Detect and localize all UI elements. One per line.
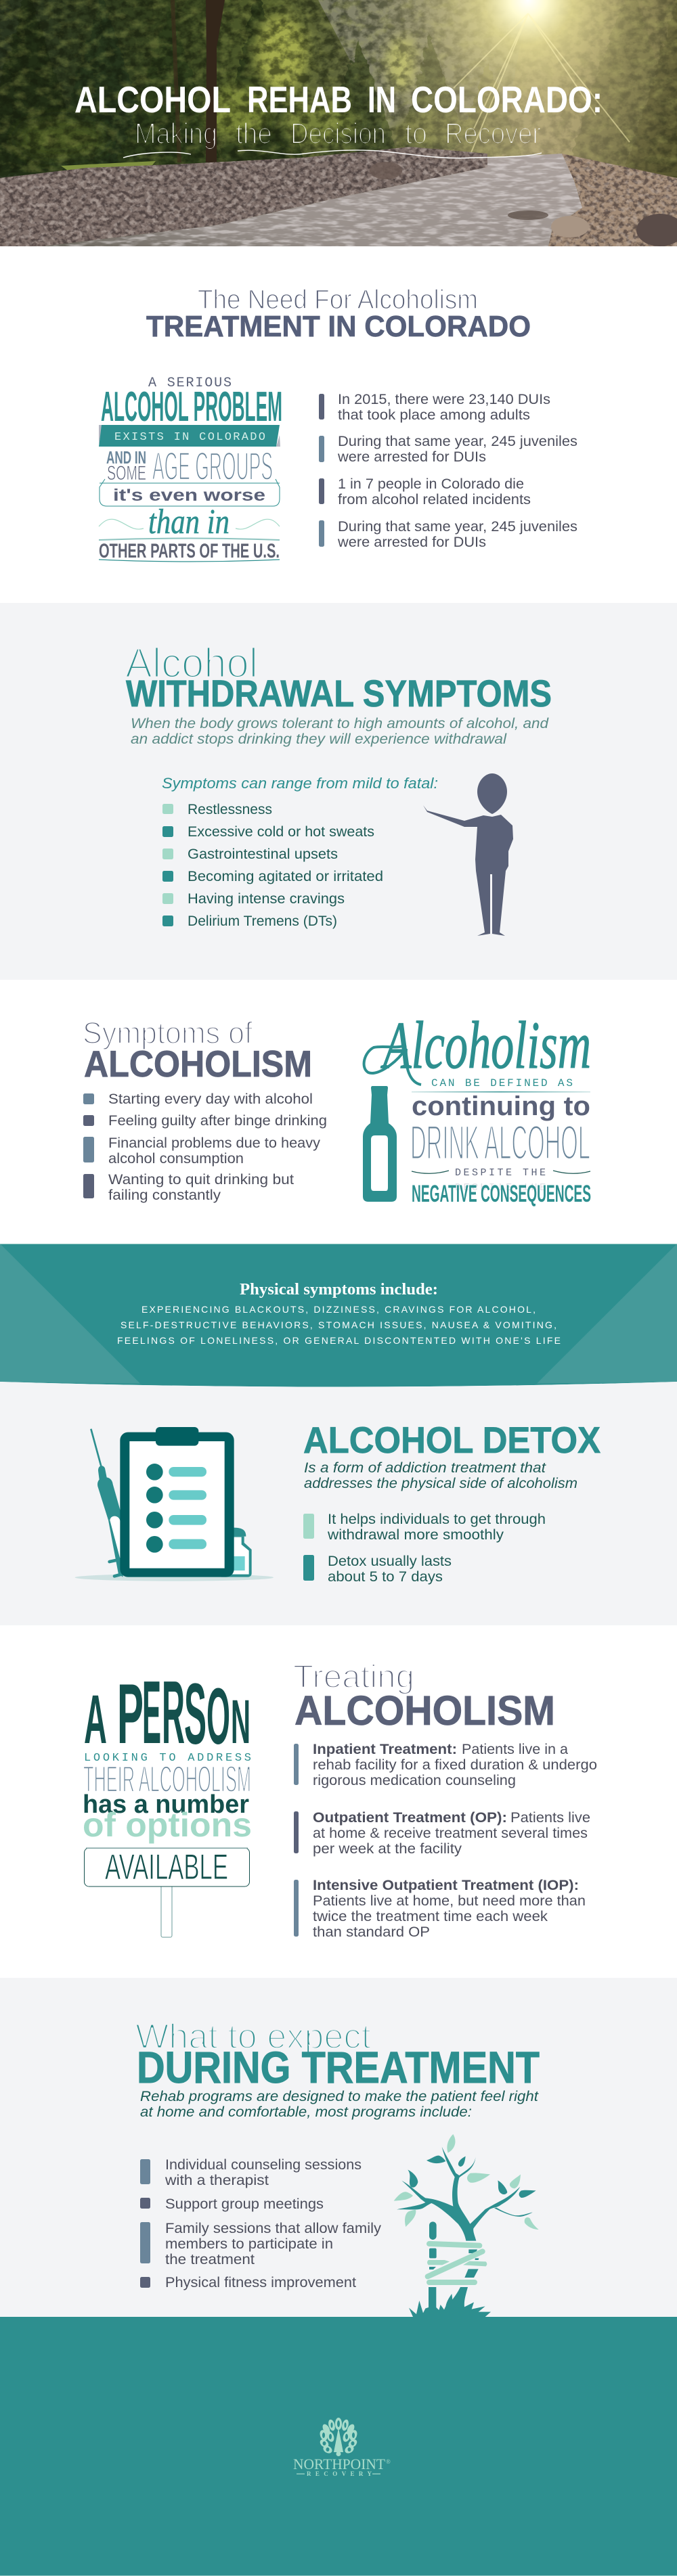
treatment: inpatient <box>294 1742 597 1788</box>
symptoms list: Delirium Tremens (DTs) <box>188 913 337 929</box>
detox description: Is a form of addiction treatment that <box>304 1460 546 1476</box>
treatment: outpatient: at home & receive treatment several times <box>313 1826 588 1841</box>
treatment: intensive outpatient: Patients live at home, but need more than <box>313 1893 586 1909</box>
subtitle <box>135 117 541 150</box>
symptoms list: Gastrointestinal upsets <box>188 846 338 862</box>
typographic sign: a person looking to address: AVAILABLE <box>105 1847 228 1887</box>
list: program elements: the treatment <box>165 2252 255 2267</box>
fact: juveniles arrested <box>319 434 577 465</box>
list: program elements <box>140 2157 382 2290</box>
physical symptoms text: FEELINGS OF LONELINESS, OR GENERAL DISCONTENTED WITH ONE'S LIFE <box>117 1335 561 1346</box>
subtitle: to <box>405 117 427 150</box>
logo: Northpoint peacock: ® <box>386 2458 391 2465</box>
subtitle: the <box>236 117 272 150</box>
subtitle: Recover <box>445 117 541 150</box>
illustration: clipboard, syringe and vial <box>75 1427 274 1581</box>
heading: Symptoms of <box>83 1016 253 1050</box>
treatment: inpatient: Patients live in a <box>462 1742 568 1757</box>
detox point two: about 5 to 7 days <box>328 1569 443 1585</box>
fact: juveniles arrested repeat: were arrested for DUIs <box>337 535 486 550</box>
treatment: intensive outpatient <box>294 1878 586 1940</box>
symptom list <box>83 1091 327 1203</box>
panel: treating alcoholism: N <box>231 1688 250 1757</box>
typographic sign: a person looking to address: E <box>142 1663 161 1762</box>
intro text: an addict stops drinking they will experience withdrawal <box>131 731 507 747</box>
list: program elements: Support group meetings <box>165 2196 324 2212</box>
list: program elements: Family sessions that allow family <box>165 2221 382 2236</box>
typographic quote: alcoholism definition <box>364 1008 591 1207</box>
list: program elements: Individual counseling sessions <box>165 2157 362 2173</box>
typographic sign: a person looking to address: R <box>162 1663 185 1762</box>
panel: need for treatment: AGE GROUPS <box>152 445 273 489</box>
heading <box>125 640 552 715</box>
intro text: When the body grows tolerant to high amounts of alcohol, and <box>131 716 549 731</box>
panel: what to expect during treatment <box>0 1978 677 2317</box>
typographic sign: a person looking to address: A <box>84 1681 107 1758</box>
typographic quote: alcoholism definition: DESPITE THE <box>455 1180 546 1192</box>
typographic sign: a person looking to address: O <box>206 1672 230 1761</box>
typographic quote: alcoholism definition: CAN BE DEFINED AS <box>431 1077 573 1089</box>
illustration: bandaged tree <box>394 2134 539 2317</box>
detox description: addresses the physical side of alcoholism <box>304 1476 577 1491</box>
icon: bottle <box>363 1086 397 1202</box>
heading: WITHDRAWAL SYMPTOMS <box>126 672 552 715</box>
detox point one: It helps individuals to get through <box>328 1512 546 1527</box>
list: program elements: members to participate in <box>165 2236 333 2252</box>
symptoms list: Becoming agitated or irritated <box>188 869 383 884</box>
typographic sign: a person looking to address: of options <box>83 1806 252 1844</box>
heading: TREATMENT IN COLORADO <box>146 310 531 343</box>
detox point one <box>303 1512 546 1543</box>
typographic sign: a person looking to address: LOOKING TO ADDRESS <box>84 1752 251 1765</box>
physical symptoms text <box>117 1304 561 1346</box>
treatment: intensive outpatient: than standard OP <box>313 1924 430 1940</box>
heading: Treating <box>293 1659 414 1695</box>
typographic quote: a serious alcohol problem: AND IN <box>106 447 146 468</box>
treatment: outpatient: per week at the facility <box>313 1841 462 1857</box>
typographic sign: a person looking to address: has a number <box>83 1790 249 1819</box>
physical symptoms text: EXPERIENCING BLACKOUTS, DIZZINESS, CRAVINGS FOR ALCOHOL, <box>141 1304 536 1315</box>
heading: DURING TREATMENT <box>137 2042 540 2092</box>
title: ALCOHOL <box>74 78 231 120</box>
panel: need for treatment: ALCOHOL PROBLEM <box>101 384 282 430</box>
fact: juveniles arrested: During that same year, 245 juveniles <box>338 434 577 449</box>
intro text <box>140 2089 539 2120</box>
treatment: outpatient <box>294 1810 590 1857</box>
fact: juveniles arrested repeat: During that same year, 245 juveniles <box>338 519 577 535</box>
treatment: outpatient: Patients live <box>510 1810 590 1826</box>
heading <box>146 285 531 343</box>
symptom list: Wanting to quit drinking but <box>108 1172 294 1188</box>
panel: footer <box>0 2317 677 2576</box>
typographic sign: a person looking to address: P <box>117 1667 144 1761</box>
heading: What to expect <box>135 2017 372 2056</box>
physical symptoms text: SELF-DESTRUCTIVE BEHAVIORS, STOMACH ISSUES, NAUSEA & VOMITING, <box>121 1319 556 1330</box>
heading: The Need For Alcoholism <box>198 285 478 315</box>
logo: Northpoint peacock: NORTHPOINT <box>293 2456 386 2472</box>
detox point one: withdrawal more smoothly <box>327 1527 504 1543</box>
typographic quote: a serious alcohol problem: SOME <box>107 462 146 484</box>
treatment: inpatient: rehab facility for a fixed duration & undergo <box>313 1757 597 1773</box>
typographic quote: a serious alcohol problem: it's even worse <box>113 486 265 505</box>
heading: ALCOHOLISM <box>84 1043 312 1085</box>
fact: DUIs among adults: that took place among adults <box>338 407 530 423</box>
band heading: Physical symptoms include: <box>240 1281 438 1298</box>
fact: DUIs among adults: In 2015, there were 23,140 DUIs <box>338 392 550 407</box>
title: IN <box>368 78 396 120</box>
subtitle: Making <box>135 117 217 150</box>
treatment: inpatient: rigorous medication counseling <box>313 1773 516 1788</box>
symptom list: alcohol consumption <box>108 1151 244 1167</box>
heading <box>135 2017 540 2092</box>
panel: treating alcoholism: THEIR ALCOHOLISM <box>83 1758 251 1800</box>
typographic quote: a serious alcohol problem: than in <box>148 503 230 541</box>
detox heading: ALCOHOL DETOX <box>303 1419 600 1461</box>
fact: 1 in 7 die: 1 in 7 people in Colorado die <box>338 476 524 492</box>
typographic quote: a serious alcohol problem <box>99 376 282 562</box>
intro text: at home and comfortable, most programs include: <box>140 2104 472 2120</box>
treatment: intensive outpatient: twice the treatment time each week <box>313 1909 548 1924</box>
treatment: intensive outpatient: Intensive Outpatient Treatment (IOP): <box>313 1878 579 1893</box>
intro text <box>131 716 549 747</box>
panel: treating alcoholism <box>83 1659 597 1940</box>
detox point two <box>303 1554 452 1585</box>
typographic quote: alcoholism definition: DESPITE THE <box>455 1167 546 1179</box>
heading: ALCOHOLISM <box>294 1688 555 1734</box>
detox point two: Detox usually lasts <box>328 1554 452 1569</box>
title: REHAB <box>247 78 352 120</box>
typographic quote: a serious alcohol problem: EXISTS IN COLORADO <box>114 431 265 444</box>
heading <box>83 1016 312 1085</box>
icon: pointing person <box>423 773 513 936</box>
panel: hero photo header <box>0 0 677 250</box>
symptom list: failing constantly <box>108 1188 221 1203</box>
symptoms list: Excessive cold or hot sweats <box>188 824 374 840</box>
typographic quote: a serious alcohol problem: OTHER PARTS OF THE U.S. <box>99 540 280 562</box>
treatment: inpatient: Inpatient Treatment: <box>313 1742 457 1757</box>
detox description <box>304 1460 577 1491</box>
fact: juveniles arrested repeat <box>319 519 577 550</box>
symptom list: Financial problems due to heavy <box>108 1135 321 1151</box>
title: COLORADO: <box>411 78 603 120</box>
fact: DUIs among adults <box>319 392 550 423</box>
panel: need for treatment <box>99 285 577 562</box>
hero forest and river scene <box>0 0 677 250</box>
panel: withdrawal symptoms <box>0 603 677 980</box>
fact: 1 in 7 die: from alcohol related incidents <box>338 492 531 507</box>
typographic sign: a person looking to address: S <box>184 1666 206 1763</box>
typographic sign: a person looking to address <box>83 1663 252 1937</box>
symptom list: Feeling guilty after binge drinking <box>108 1113 327 1129</box>
intro text: Rehab programs are designed to make the patient feel right <box>140 2089 539 2104</box>
title <box>74 78 603 120</box>
symptoms list: Restlessness <box>188 802 272 817</box>
typographic quote: a serious alcohol problem: A SERIOUS <box>148 376 232 391</box>
treatment: outpatient: Outpatient Treatment (OP): <box>313 1810 507 1826</box>
fact: 1 in 7 die <box>319 476 531 507</box>
logo: Northpoint peacock <box>293 2418 391 2477</box>
symptoms subheading: Symptoms can range from mild to fatal: <box>162 775 438 792</box>
list: program elements: Physical fitness improvement <box>165 2275 356 2290</box>
heading <box>293 1659 555 1734</box>
subtitle wave underline <box>123 150 542 158</box>
symptom list: Starting every day with alcohol <box>108 1091 313 1107</box>
panel: physical symptoms band <box>0 1244 677 1387</box>
typographic quote: alcoholism definition: continuing to <box>412 1091 590 1121</box>
list: program elements: with a therapist <box>165 2173 269 2188</box>
heading: Alcohol <box>125 640 258 687</box>
logo: Northpoint peacock: RECOVERY <box>307 2470 372 2477</box>
subtitle: Decision <box>290 117 386 150</box>
panel: symptoms of alcoholism <box>83 1008 591 1207</box>
symptoms list: Having intense cravings <box>188 891 345 907</box>
fact: juveniles arrested: were arrested for DUIs <box>337 449 486 465</box>
symptoms list <box>162 802 383 929</box>
panel: alcohol detox <box>0 1382 677 1625</box>
